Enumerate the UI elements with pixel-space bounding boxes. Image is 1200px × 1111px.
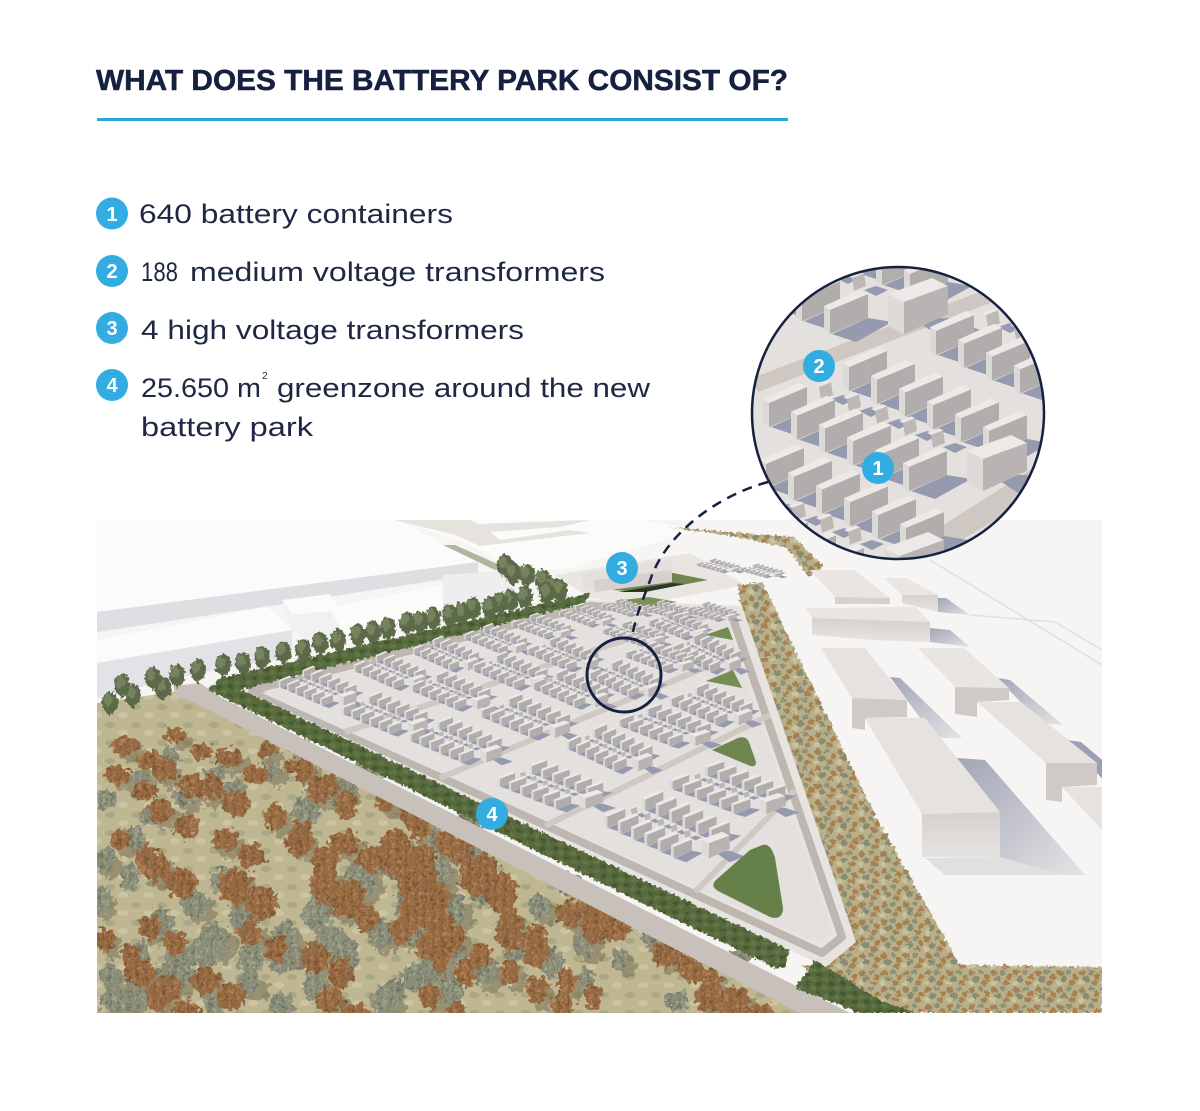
inset badge 2: 2	[813, 356, 825, 378]
legend item 4: 4	[106, 375, 118, 397]
map badge 3	[606, 552, 638, 584]
legend item 2: 2	[106, 261, 118, 283]
magnifier inset	[750, 266, 1046, 560]
scrubland: north strip	[666, 527, 824, 577]
battery container clusters	[279, 598, 800, 862]
zoom focus ring	[587, 638, 661, 712]
high voltage transformer yard	[594, 570, 708, 606]
legend item 3	[96, 312, 524, 345]
inset battery clusters	[761, 268, 1042, 558]
building shadows east	[890, 598, 1108, 875]
scrubland: south west	[97, 692, 800, 1013]
legend item 4: 25.650 m	[141, 373, 261, 403]
scrubland: east strip	[738, 582, 1102, 1013]
title: WHAT DOES THE BATTERY PARK CONSIST OF?	[96, 65, 788, 97]
inset badge 1	[862, 452, 894, 484]
legend item 3: 4 high voltage transformers	[141, 315, 524, 345]
map badge 4: 4	[486, 804, 498, 826]
legend list	[96, 198, 651, 442]
dashed connector	[633, 482, 768, 632]
legend item 3: 3	[106, 318, 118, 340]
legend item 1: 640 battery containers	[139, 199, 453, 229]
aerial render of site	[56, 520, 1108, 1034]
inset roads	[756, 292, 1030, 539]
hedge greenzone along park	[208, 593, 915, 1013]
inset badge 1: 1	[872, 458, 884, 480]
legend item 1: 1	[106, 204, 118, 226]
buildings: left industrial halls	[97, 520, 589, 698]
legend item 4	[96, 369, 651, 442]
legend item 2	[96, 255, 605, 287]
legend item 2: medium voltage transformers	[190, 257, 605, 287]
park base and perimeter road	[240, 600, 856, 967]
infographic: battery park	[96, 70, 1102, 1013]
map badge 3: 3	[616, 558, 628, 580]
small cluster area north	[696, 558, 788, 578]
land strip and upper access road	[443, 545, 745, 605]
legend item 4: greenzone around the new	[277, 373, 651, 403]
inset badge 2	[803, 350, 835, 382]
tree line	[102, 554, 568, 716]
map badge 4	[476, 798, 508, 830]
legend item 2: 188	[141, 257, 178, 287]
buildings east	[806, 570, 1102, 857]
legend item 4: battery park	[141, 412, 314, 442]
green triangles	[705, 627, 783, 918]
legend item 4: 2	[262, 371, 268, 382]
east plot outlines	[930, 560, 1102, 665]
site road	[173, 683, 850, 1013]
title underline	[97, 118, 788, 121]
